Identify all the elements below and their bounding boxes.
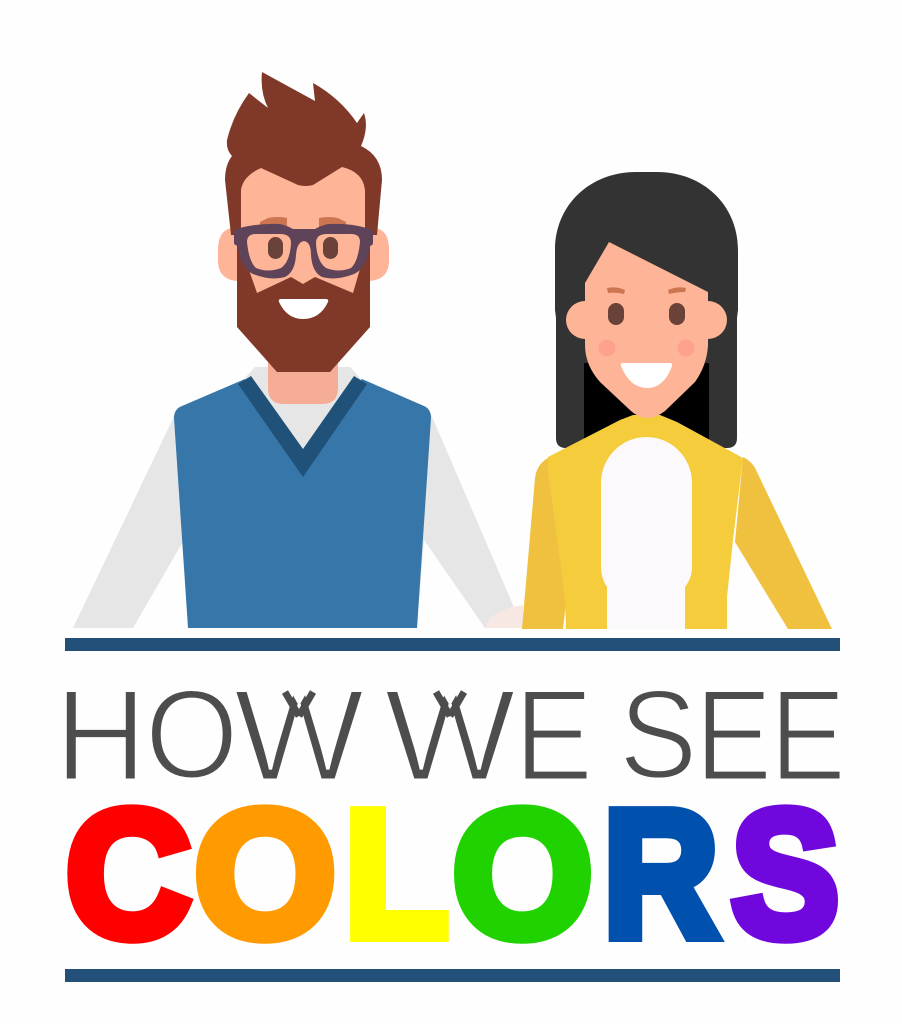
heading: COLORS in rainbow letters: L (344, 774, 448, 975)
heading: HOW WE SEE: E (770, 663, 846, 808)
illustration: man with beard and glasses (73, 72, 524, 628)
woman's hair (555, 172, 738, 448)
woman's smile (621, 363, 672, 388)
man's smile (279, 299, 328, 319)
bottom divider bar (65, 969, 840, 982)
heading: HOW WE SEE: W (384, 662, 516, 808)
heading: COLORS in rainbow letters: R (603, 774, 718, 975)
man's neck (268, 360, 338, 404)
vest V-neck trim (238, 376, 367, 477)
heading: HOW WE SEE (55, 662, 846, 809)
woman's ears (566, 301, 727, 339)
heading: COLORS in rainbow letters (66, 774, 839, 975)
man's eyes (268, 237, 338, 259)
top divider bar (65, 638, 840, 651)
woman's eyebrows (607, 287, 686, 294)
shadow behind woman's neck (584, 363, 709, 448)
heading: HOW WE SEE: E (695, 664, 772, 809)
illustration: woman with dark hair and yellow jacket (522, 172, 832, 629)
heading: COLORS in rainbow letters: C (66, 774, 191, 975)
man's eyebrows (260, 217, 346, 228)
woman's left sleeve (522, 457, 566, 629)
heading: COLORS in rainbow letters: O (194, 774, 336, 975)
woman's cheeks (598, 340, 694, 356)
heading: HOW WE SEE: O (145, 664, 238, 806)
woman's right sleeve (735, 457, 832, 629)
man's glasses (234, 224, 373, 278)
heading: HOW WE SEE: H (55, 664, 147, 808)
heading: HOW WE SEE: E (514, 664, 593, 808)
heading: HOW WE SEE: S (619, 663, 697, 805)
heading: HOW WE SEE: W (234, 664, 365, 808)
man's left ear (218, 228, 240, 281)
man's beard (237, 228, 370, 372)
man's right ear (367, 228, 389, 281)
man's vest (174, 379, 431, 628)
crossed centre strokes of the W letters (285, 690, 464, 716)
woman's white top (601, 437, 692, 629)
woman's face (585, 242, 708, 418)
woman's jacket body (548, 415, 743, 629)
heading: COLORS in rainbow letters: O (453, 774, 593, 975)
man's shirt and sleeves (73, 367, 524, 628)
woman's eyes (608, 303, 685, 325)
man's hair (225, 72, 382, 235)
heading: COLORS in rainbow letters: S (732, 774, 839, 975)
man's face (241, 167, 365, 300)
